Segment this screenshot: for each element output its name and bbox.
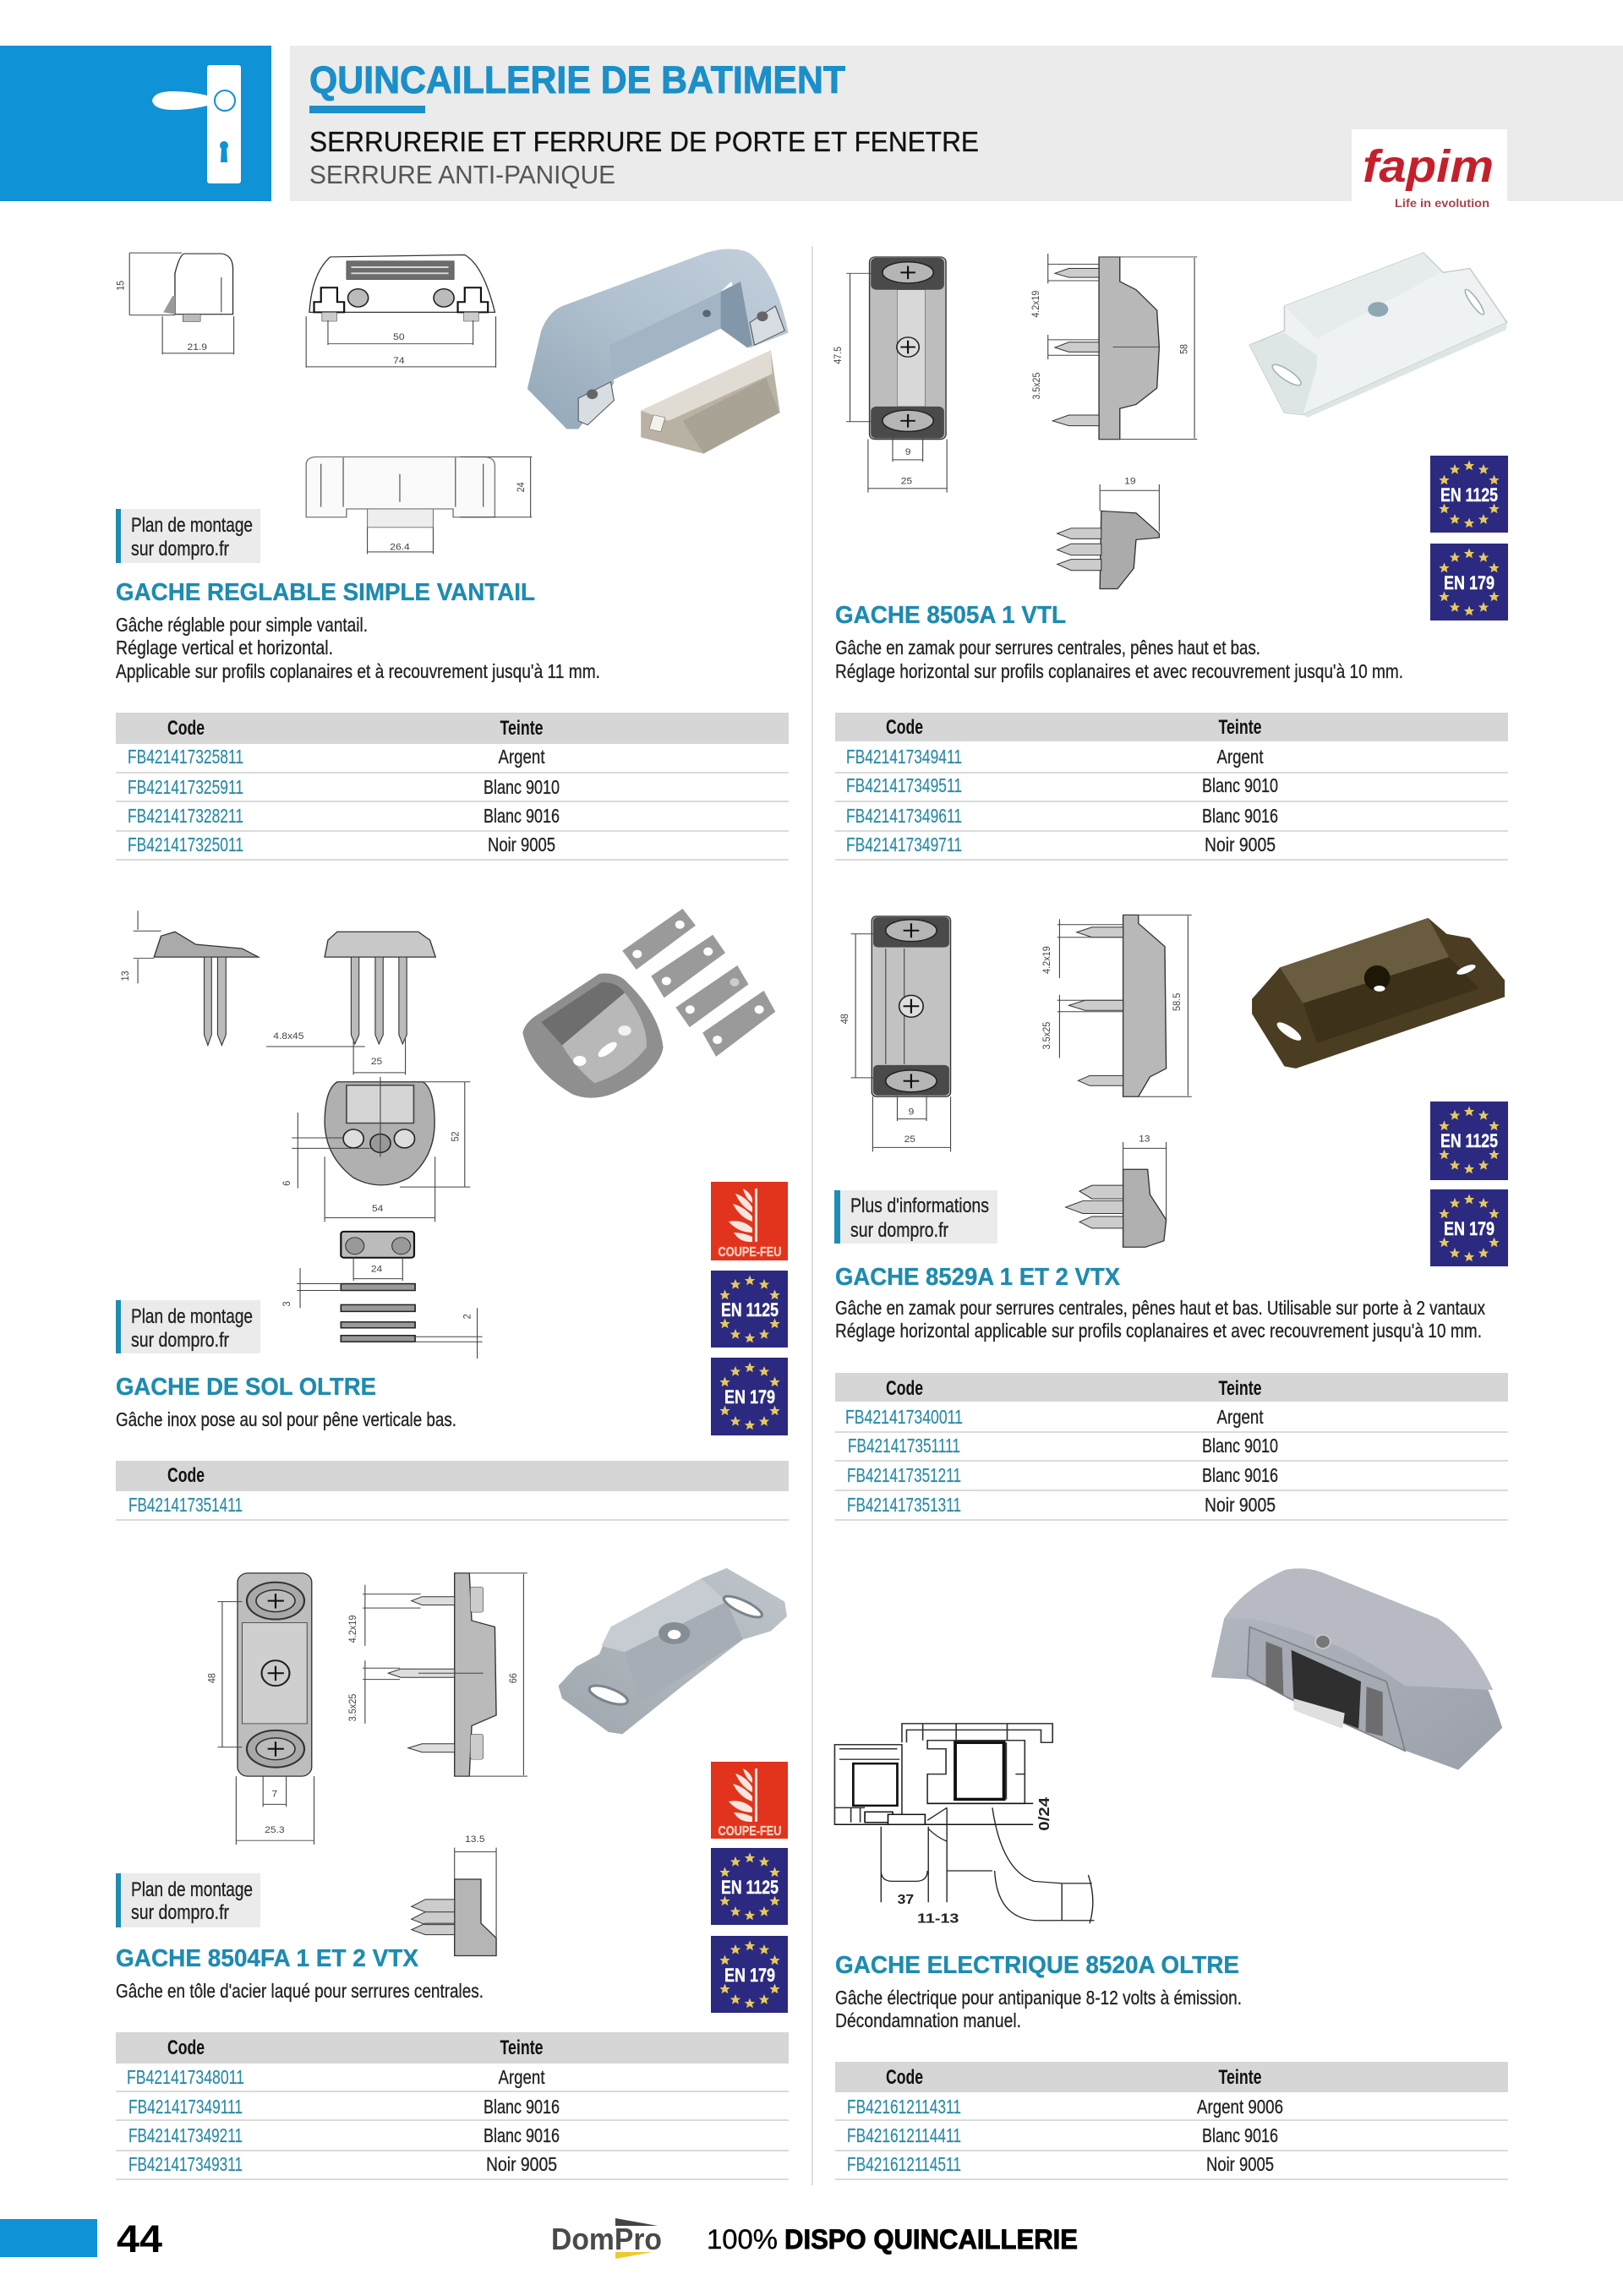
table <box>835 2062 1508 2179</box>
table: Blanc 9016 <box>484 2124 560 2146</box>
table: Argent 9006 <box>1197 2096 1283 2118</box>
technical drawings: 15 <box>116 281 127 291</box>
panel: gache 8529A 1 et 2 VTX <box>834 915 1508 1520</box>
table: Blanc 9016 <box>1202 805 1278 827</box>
product photo: electric strike <box>1211 1568 1502 1770</box>
table: Noir 9005 <box>1205 834 1276 856</box>
panel: gache 8504FA 1 et 2 VTX <box>116 1568 789 2179</box>
technical drawings: 25 <box>901 477 912 486</box>
product photo: brown strike <box>1252 918 1505 1069</box>
table: Noir 9005 <box>1206 2153 1274 2175</box>
technical drawings: 4.2x19 <box>1030 291 1041 318</box>
footer blue tab <box>0 2219 97 2257</box>
table: FB421417325011 <box>128 834 243 856</box>
table: Argent <box>1217 746 1264 768</box>
badge: coupe-feu <box>711 1762 788 1839</box>
table: FB421417349411 <box>846 746 962 768</box>
badge: EN 179 <box>1430 544 1508 620</box>
table: FB421417340011 <box>845 1406 963 1428</box>
technical drawings: 2 <box>462 1314 473 1319</box>
technical drawings: 25 <box>904 1134 915 1145</box>
product photo: grey strike and latch <box>527 249 789 454</box>
technical section drawing <box>834 1724 1095 1926</box>
technical drawings: 4.2x19 <box>1042 946 1052 974</box>
description: Réglage vertical et horizontal. <box>116 637 333 659</box>
title: QUINCAILLERIE DE BATIMENT <box>309 58 845 101</box>
panel: gache reglable simple vantail <box>116 249 789 860</box>
slogan: DISPO QUINCAILLERIE <box>784 2224 1078 2255</box>
table: FB421417349211 <box>128 2124 243 2146</box>
technical section drawing: 11-13 <box>917 1911 959 1926</box>
product photo: floor strike and plates <box>522 909 775 1098</box>
panel: gache electrique 8520A oltre <box>834 1568 1508 2179</box>
technical drawings: 3 <box>282 1301 292 1306</box>
description <box>116 614 600 682</box>
table: Argent <box>499 2066 545 2088</box>
logo: DomPro: DomPro <box>551 2222 662 2256</box>
technical drawings: 4.8x45 <box>273 1032 303 1041</box>
table <box>116 2032 789 2179</box>
button: plus d'informations: sur dompro.fr <box>850 1219 948 1242</box>
description: Gâche électrique pour antipanique 8-12 volts à émission. <box>835 1987 1242 2009</box>
table: FB421417349611 <box>846 805 962 827</box>
brand logo: fapim <box>1352 129 1507 211</box>
table: FB421417349711 <box>846 834 962 856</box>
table: Noir 9005 <box>1205 1494 1276 1516</box>
technical drawings: 4.2x19 <box>347 1615 358 1643</box>
page number: 44 <box>117 2217 162 2260</box>
table: Blanc 9016 <box>484 2096 560 2118</box>
description: Gâche réglable pour simple vantail. <box>116 614 368 636</box>
button: plan de montage: Plan de montage <box>131 1305 253 1328</box>
description: Gâche en tôle d'acier laqué pour serrures centrales. <box>116 1980 484 2002</box>
brand logo: fapim: Life in evolution <box>1395 196 1489 210</box>
table: FB421417328211 <box>128 805 243 827</box>
table <box>116 713 789 860</box>
technical drawings: 13.5 <box>465 1835 485 1845</box>
header grey panel <box>290 46 1623 201</box>
badge: coupe-feu <box>711 1182 788 1260</box>
technical drawings: 3.5x25 <box>1031 373 1042 400</box>
badge: EN 179: EN 179 <box>724 1965 775 1986</box>
badge: coupe-feu: COUPE-FEU <box>719 1824 781 1839</box>
table: Code <box>886 1377 923 1400</box>
badge: EN 179 <box>711 1936 788 2013</box>
description <box>835 1297 1485 1342</box>
subtitle: SERRURERIE ET FERRURE DE PORTE ET FENETRE <box>309 126 979 157</box>
table: Argent <box>1217 1406 1264 1428</box>
technical drawings: 13 <box>1139 1134 1150 1144</box>
brand logo: fapim: fapim <box>1363 141 1494 192</box>
panel: gache de sol oltre <box>116 909 789 1520</box>
product photo: silver strike <box>559 1568 787 1734</box>
button: plan de montage <box>116 509 260 563</box>
description: Gâche inox pose au sol pour pêne verticale bas. <box>116 1408 456 1430</box>
technical drawings: 13 <box>121 970 131 981</box>
technical drawings: 6 <box>282 1181 292 1186</box>
heading: GACHE 8505A 1 VTL <box>835 602 1066 629</box>
table: Blanc 9010 <box>1202 774 1278 796</box>
badge: EN 179: EN 179 <box>724 1386 775 1408</box>
description: Réglage horizontal sur profils coplanaires et avec recouvrement jusqu'à 10 mm. <box>835 660 1403 682</box>
description: Gâche en zamak pour serrures centrales, pênes haut et bas. <box>835 637 1260 659</box>
button: plan de montage <box>116 1873 260 1927</box>
technical drawings <box>839 915 1192 1247</box>
button: plan de montage <box>116 1300 260 1353</box>
badge: EN 179: EN 179 <box>1444 1218 1495 1239</box>
badge: EN 179: EN 179 <box>1444 572 1495 593</box>
sub-subtitle: SERRURE ANTI-PANIQUE <box>309 160 615 189</box>
technical drawings: 21.9 <box>188 343 207 353</box>
description <box>835 637 1403 682</box>
button: plus d'informations <box>834 1190 997 1244</box>
table: Code <box>886 716 923 739</box>
technical drawings: 54 <box>372 1204 384 1214</box>
table: Code <box>886 2066 923 2089</box>
badge: coupe-feu: COUPE-FEU <box>719 1245 781 1260</box>
table: FB421612114311 <box>847 2096 961 2118</box>
footer <box>0 2217 1078 2260</box>
technical drawings: 24 <box>516 482 527 492</box>
table: Noir 9005 <box>486 2153 557 2175</box>
table: Blanc 9010 <box>1202 1435 1278 1457</box>
description: Gâche en zamak pour serrures centrales, pênes haut et bas. Utilisable sur porte à 2 vantaux <box>835 1297 1485 1319</box>
description: Applicable sur profils coplanaires et à recouvrement jusqu'à 11 mm. <box>116 660 600 682</box>
technical drawings: 19 <box>1124 477 1136 486</box>
technical drawings: 58 <box>1179 344 1189 354</box>
table: FB421417351311 <box>847 1494 961 1516</box>
table: Blanc 9010 <box>484 776 560 798</box>
technical drawings <box>116 253 532 554</box>
badge: EN 1125 <box>711 1271 788 1348</box>
icon panel: door handle <box>0 46 271 201</box>
technical drawings: 9 <box>909 1107 914 1117</box>
technical drawings: 9 <box>905 448 910 457</box>
heading: GACHE REGLABLE SIMPLE VANTAIL <box>116 579 535 606</box>
technical drawings: 25.3 <box>265 1826 285 1835</box>
technical drawings: 3.5x25 <box>1042 1022 1052 1049</box>
technical drawings: 3.5x25 <box>347 1694 358 1721</box>
description: Réglage horizontal applicable sur profils coplanaires et avec recouvrement jusqu'à 10 mm. <box>835 1320 1482 1342</box>
technical drawings: 24 <box>371 1265 383 1274</box>
table: Argent <box>499 746 545 768</box>
description: Décondamnation manuel. <box>835 2009 1021 2031</box>
heading: GACHE 8529A 1 ET 2 VTX <box>835 1264 1121 1291</box>
table: FB421417348011 <box>127 2066 244 2088</box>
technical drawings <box>121 910 483 1358</box>
heading: GACHE 8504FA 1 ET 2 VTX <box>116 1945 419 1972</box>
technical section drawing: 37 <box>898 1892 914 1907</box>
badge: EN 1125: EN 1125 <box>721 1299 779 1320</box>
table: Teinte <box>1219 2066 1261 2089</box>
table: Blanc 9016 <box>484 805 560 827</box>
button: plan de montage: sur dompro.fr <box>131 1329 229 1352</box>
technical drawings: 26.4 <box>390 543 410 552</box>
table: Code <box>167 717 205 740</box>
table: FB421417349311 <box>128 2153 243 2175</box>
badge: EN 179 <box>1430 1189 1508 1266</box>
table <box>116 1461 789 1520</box>
panel: gache 8505A 1 VTL <box>833 253 1508 860</box>
technical drawings <box>207 1573 527 1955</box>
technical section drawing: 0/24 <box>1036 1796 1052 1831</box>
badge: EN 1125 <box>711 1848 788 1925</box>
badge: EN 1125: EN 1125 <box>1440 1130 1498 1151</box>
description <box>835 1987 1242 2031</box>
button: plan de montage: Plan de montage <box>131 514 253 537</box>
table: Teinte <box>500 2036 543 2059</box>
slogan: 100% <box>707 2224 778 2255</box>
badge: EN 179 <box>711 1358 788 1435</box>
badge: EN 1125: EN 1125 <box>1440 484 1498 506</box>
badge: EN 1125 <box>1430 1102 1508 1180</box>
title underline <box>309 106 425 113</box>
table: Noir 9005 <box>488 834 555 856</box>
table: FB421612114411 <box>847 2124 961 2146</box>
heading: GACHE ELECTRIQUE 8520A OLTRE <box>835 1952 1239 1979</box>
table: FB421417351111 <box>848 1435 960 1457</box>
technical drawings: 7 <box>272 1790 277 1799</box>
table: FB421417351211 <box>847 1464 961 1486</box>
heading: GACHE DE SOL OLTRE <box>116 1374 376 1401</box>
table: FB421417325911 <box>128 776 243 798</box>
table: Blanc 9016 <box>1202 2124 1278 2146</box>
technical drawings: 25 <box>371 1057 382 1067</box>
technical drawings: 58.5 <box>1172 993 1183 1011</box>
badge: EN 1125 <box>1430 456 1508 533</box>
product photo: white strike <box>1249 253 1507 418</box>
technical drawings: 48 <box>207 1673 218 1683</box>
badge: EN 1125: EN 1125 <box>721 1877 779 1898</box>
table <box>835 713 1508 860</box>
table: Code <box>167 2036 205 2059</box>
table: FB421417349111 <box>128 2096 243 2118</box>
table: FB421417325811 <box>128 746 243 768</box>
technical drawings: 66 <box>509 1673 519 1683</box>
table: FB421612114511 <box>847 2153 961 2175</box>
table <box>835 1373 1508 1520</box>
header band <box>0 46 1623 211</box>
technical drawings <box>833 254 1197 589</box>
table: Blanc 9016 <box>1202 1464 1278 1486</box>
column divider <box>812 246 813 2185</box>
technical drawings: 48 <box>839 1014 850 1024</box>
button: plus d'informations: Plus d'informations <box>850 1194 989 1217</box>
table: Code <box>167 1464 205 1487</box>
table: Teinte <box>500 717 543 740</box>
technical drawings: 50 <box>393 332 405 342</box>
button: plan de montage: Plan de montage <box>131 1878 253 1901</box>
technical drawings: 74 <box>393 357 405 366</box>
button: plan de montage: sur dompro.fr <box>131 538 229 560</box>
table: FB421417349511 <box>846 774 962 796</box>
table: Teinte <box>1219 716 1261 739</box>
button: plan de montage: sur dompro.fr <box>131 1901 229 1924</box>
table: Teinte <box>1219 1377 1261 1400</box>
table: FB421417351411 <box>128 1494 243 1516</box>
technical drawings: 52 <box>451 1131 462 1142</box>
technical drawings: 47.5 <box>833 347 844 364</box>
